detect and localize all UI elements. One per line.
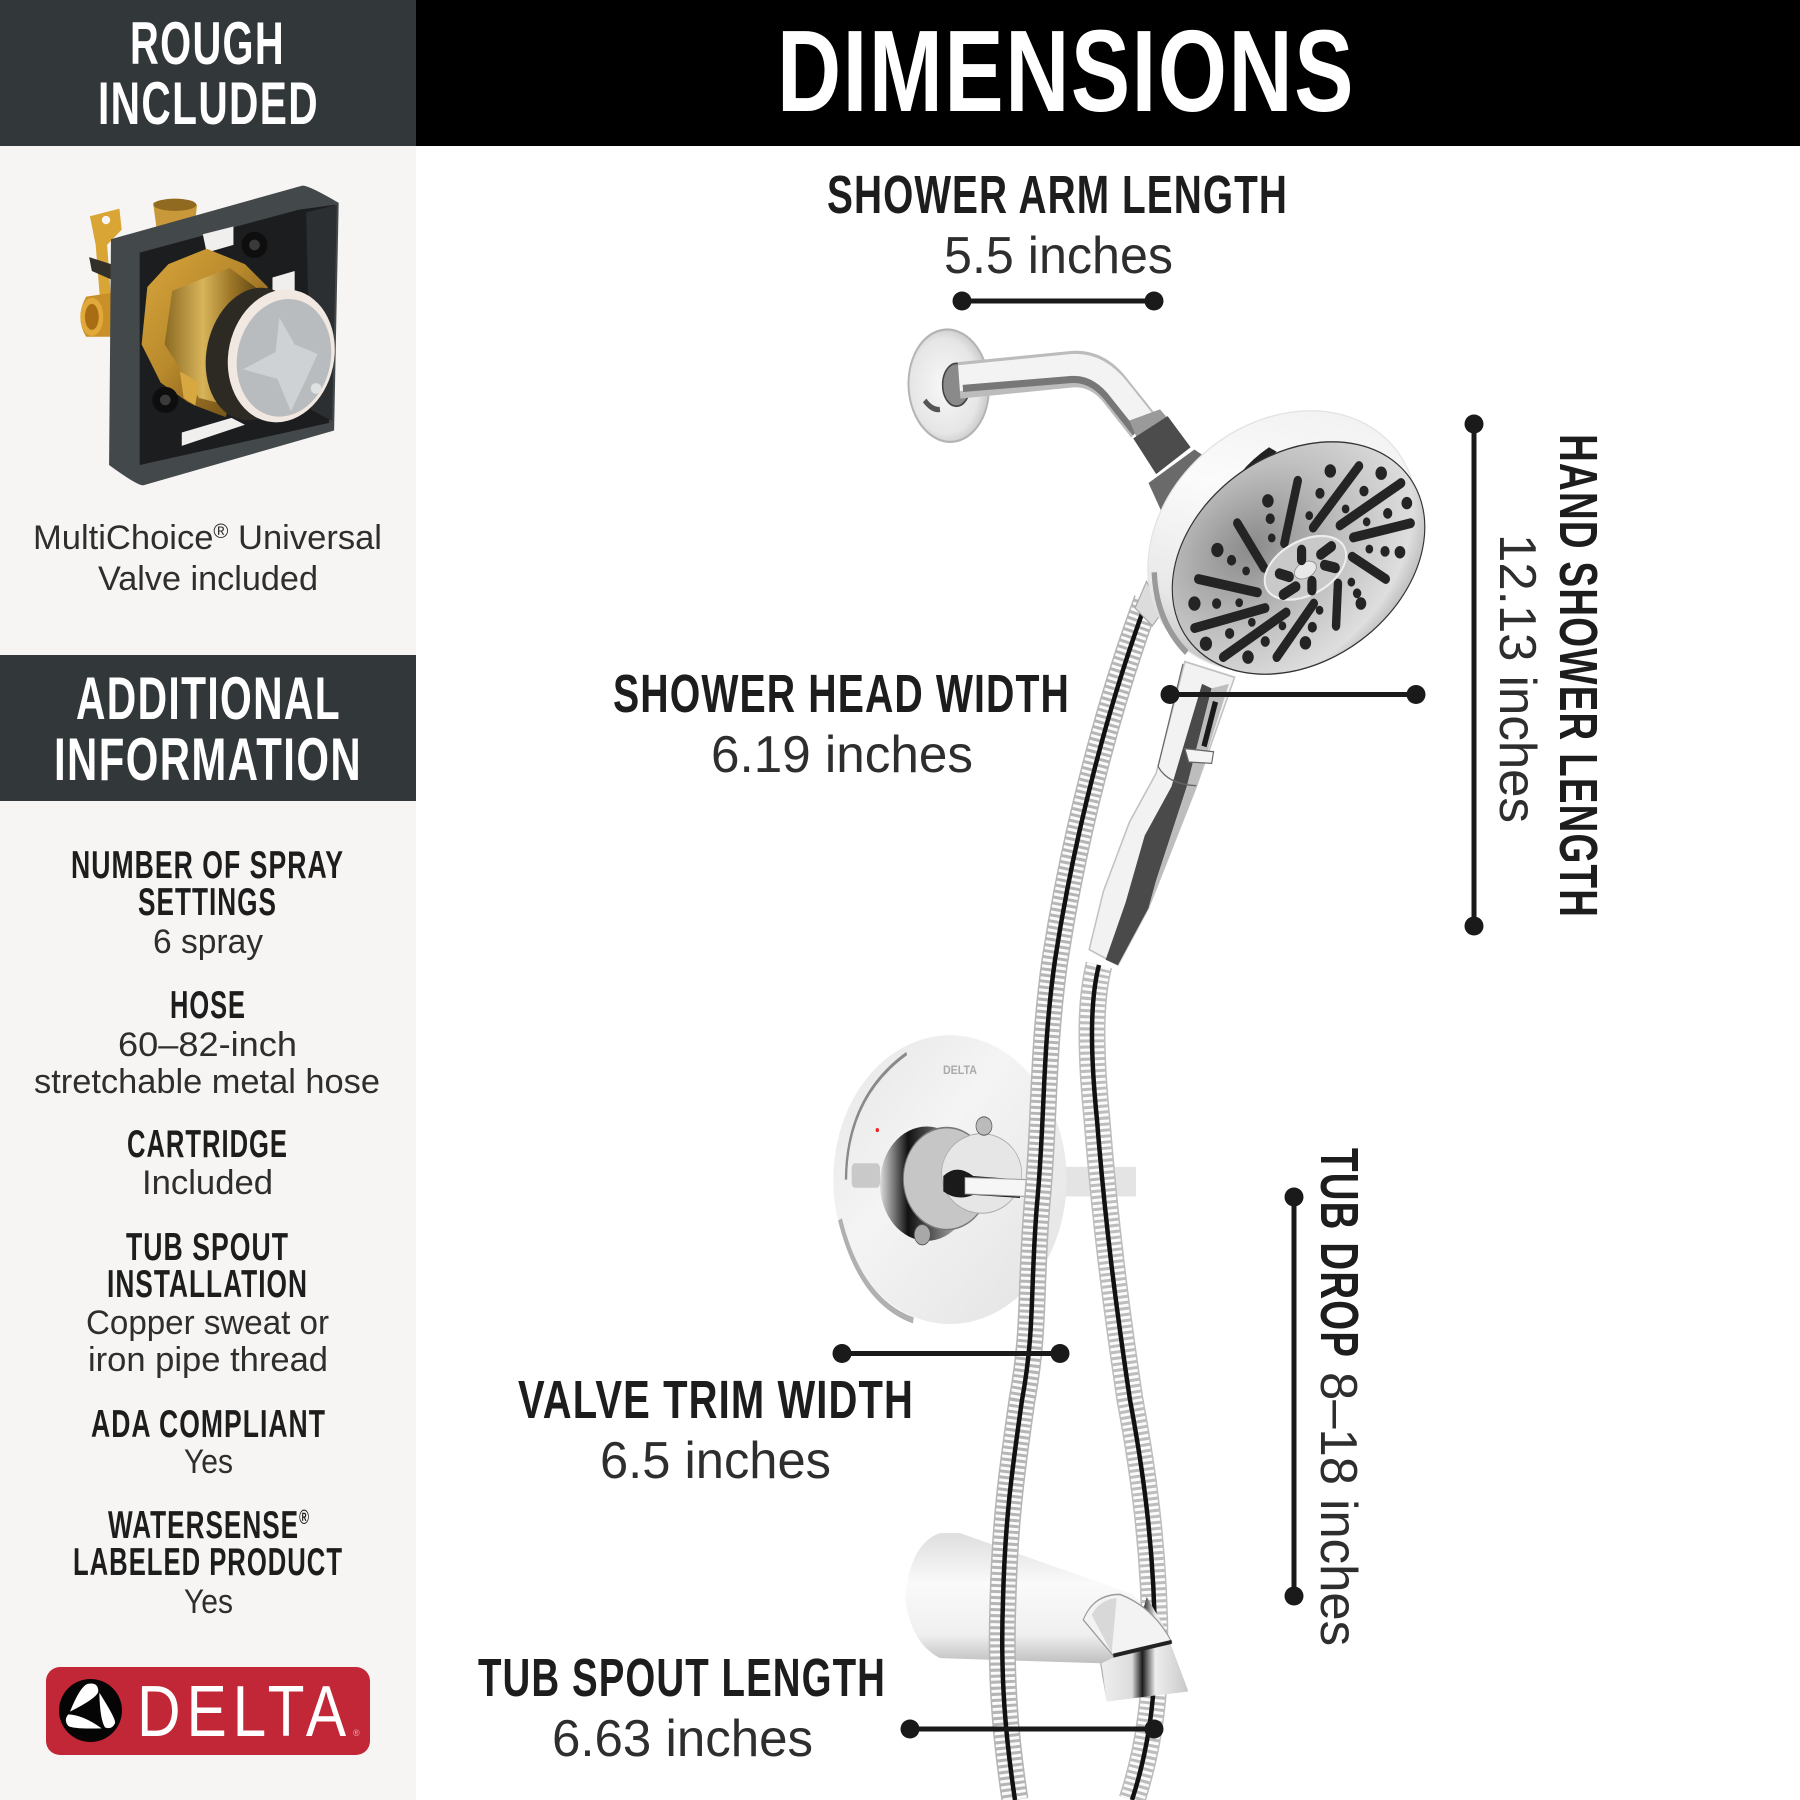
spec: watersense labeled product: ®	[299, 1507, 310, 1529]
panel: dimensions header band	[416, 0, 1800, 146]
spec: watersense labeled product: WATERSENSE	[108, 1504, 393, 1547]
dimension: hand shower length: HAND SHOWER LENGTH	[1548, 434, 1608, 918]
dimension: shower head width	[613, 664, 1426, 784]
head face	[1141, 398, 1456, 719]
icon: valve trim plate and handle: DELTA	[943, 1065, 978, 1078]
caption: valve included	[33, 519, 382, 598]
dimension: hand shower length: 12.13 inches	[1488, 534, 1546, 823]
spec: tub spout installation: Copper sweat or	[86, 1304, 329, 1342]
dimension: tub spout length	[478, 1648, 1164, 1768]
spec: tub spout installation: TUB SPOUT	[126, 1226, 289, 1269]
spec: watersense labeled product: LABELED PRODUCT	[73, 1541, 343, 1584]
spec: watersense labeled product: Yes	[184, 1583, 233, 1621]
spec: number of spray settings: NUMBER OF SPRAY	[71, 844, 344, 887]
hose collar	[1135, 581, 1162, 626]
logo: delta	[46, 1667, 370, 1755]
dimension: tub drop: 8–18 inches	[1309, 1372, 1367, 1646]
spec: ada compliant: ADA COMPLIANT	[91, 1403, 326, 1446]
spec: hose: 60–82-inch	[118, 1026, 297, 1064]
panel: sidebar background	[0, 0, 416, 1800]
icon: hose to handle	[1092, 965, 1155, 1800]
head body	[1112, 363, 1453, 719]
spec: ada compliant	[91, 1403, 326, 1481]
dimension: shower head width: SHOWER HEAD WIDTH	[613, 664, 1070, 724]
heading: additional information	[0, 655, 416, 801]
icon: rough-in valve photo	[80, 186, 347, 485]
spec: tub spout installation	[86, 1226, 329, 1379]
dimension: hand shower length	[1464, 414, 1608, 936]
dimension: valve trim width	[518, 1344, 1070, 1490]
frame	[109, 186, 339, 485]
dimension: tub drop: TUB DROP	[1309, 1148, 1369, 1358]
caption: valve included: MultiChoice	[33, 519, 211, 557]
spec: cartridge: CARTRIDGE	[127, 1123, 288, 1166]
icon: spout nose over hose	[1083, 1594, 1188, 1702]
title: dimensions: DIMENSIONS	[777, 6, 1355, 136]
heading: rough included	[0, 0, 416, 146]
dimension: tub spout length: TUB SPOUT LENGTH	[478, 1648, 886, 1708]
dimension: tub spout length: 6.63 inches	[552, 1710, 813, 1768]
logo: delta: DELTA	[137, 1672, 352, 1752]
dimension: shower arm length: 5.5 inches	[944, 227, 1173, 285]
spec: ada compliant: Yes	[184, 1443, 233, 1481]
dimension: shower arm length: SHOWER ARM LENGTH	[827, 165, 1288, 225]
heading: rough included: INCLUDED	[98, 70, 319, 137]
icon: hose to wall	[1002, 600, 1147, 1800]
spec: cartridge	[127, 1123, 288, 1202]
spec: hose	[34, 984, 380, 1101]
dimension: shower head width: 6.19 inches	[711, 726, 973, 784]
spec: hose: stretchable metal hose	[34, 1063, 380, 1101]
caption: valve included: ®	[213, 521, 229, 543]
caption: valve included: Valve included	[98, 560, 318, 598]
logo: delta: ®	[353, 1728, 360, 1738]
icon: tub spout	[905, 1533, 1188, 1702]
spec: hose: HOSE	[170, 984, 246, 1027]
caption: valve included: Universal	[228, 519, 382, 557]
icon: shower arm and flange	[904, 325, 1217, 521]
spec: number of spray settings	[71, 844, 344, 961]
cap	[194, 279, 315, 429]
heading: rough included: ROUGH	[130, 10, 285, 77]
icon: hand shower head and handle	[1089, 363, 1456, 965]
heading: additional information: INFORMATION	[54, 726, 362, 793]
dimension: shower arm length	[827, 165, 1288, 310]
heading: additional information: ADDITIONAL	[76, 665, 341, 732]
spec: number of spray settings: SETTINGS	[138, 881, 277, 924]
dimension: valve trim width: VALVE TRIM WIDTH	[518, 1370, 914, 1430]
dimension: tub drop	[1284, 1148, 1369, 1646]
dimension: valve trim width: 6.5 inches	[600, 1432, 831, 1490]
spec: cartridge: Included	[142, 1164, 273, 1202]
brass body	[142, 249, 268, 417]
spec: number of spray settings: 6 spray	[153, 923, 263, 961]
spec: tub spout installation: INSTALLATION	[107, 1263, 308, 1306]
nozzles	[1194, 466, 1411, 657]
handle	[1089, 662, 1235, 965]
spec: tub spout installation: iron pipe thread	[88, 1341, 328, 1379]
spec: watersense labeled product	[73, 1504, 343, 1621]
icon: valve trim plate and handle	[833, 1035, 1136, 1324]
